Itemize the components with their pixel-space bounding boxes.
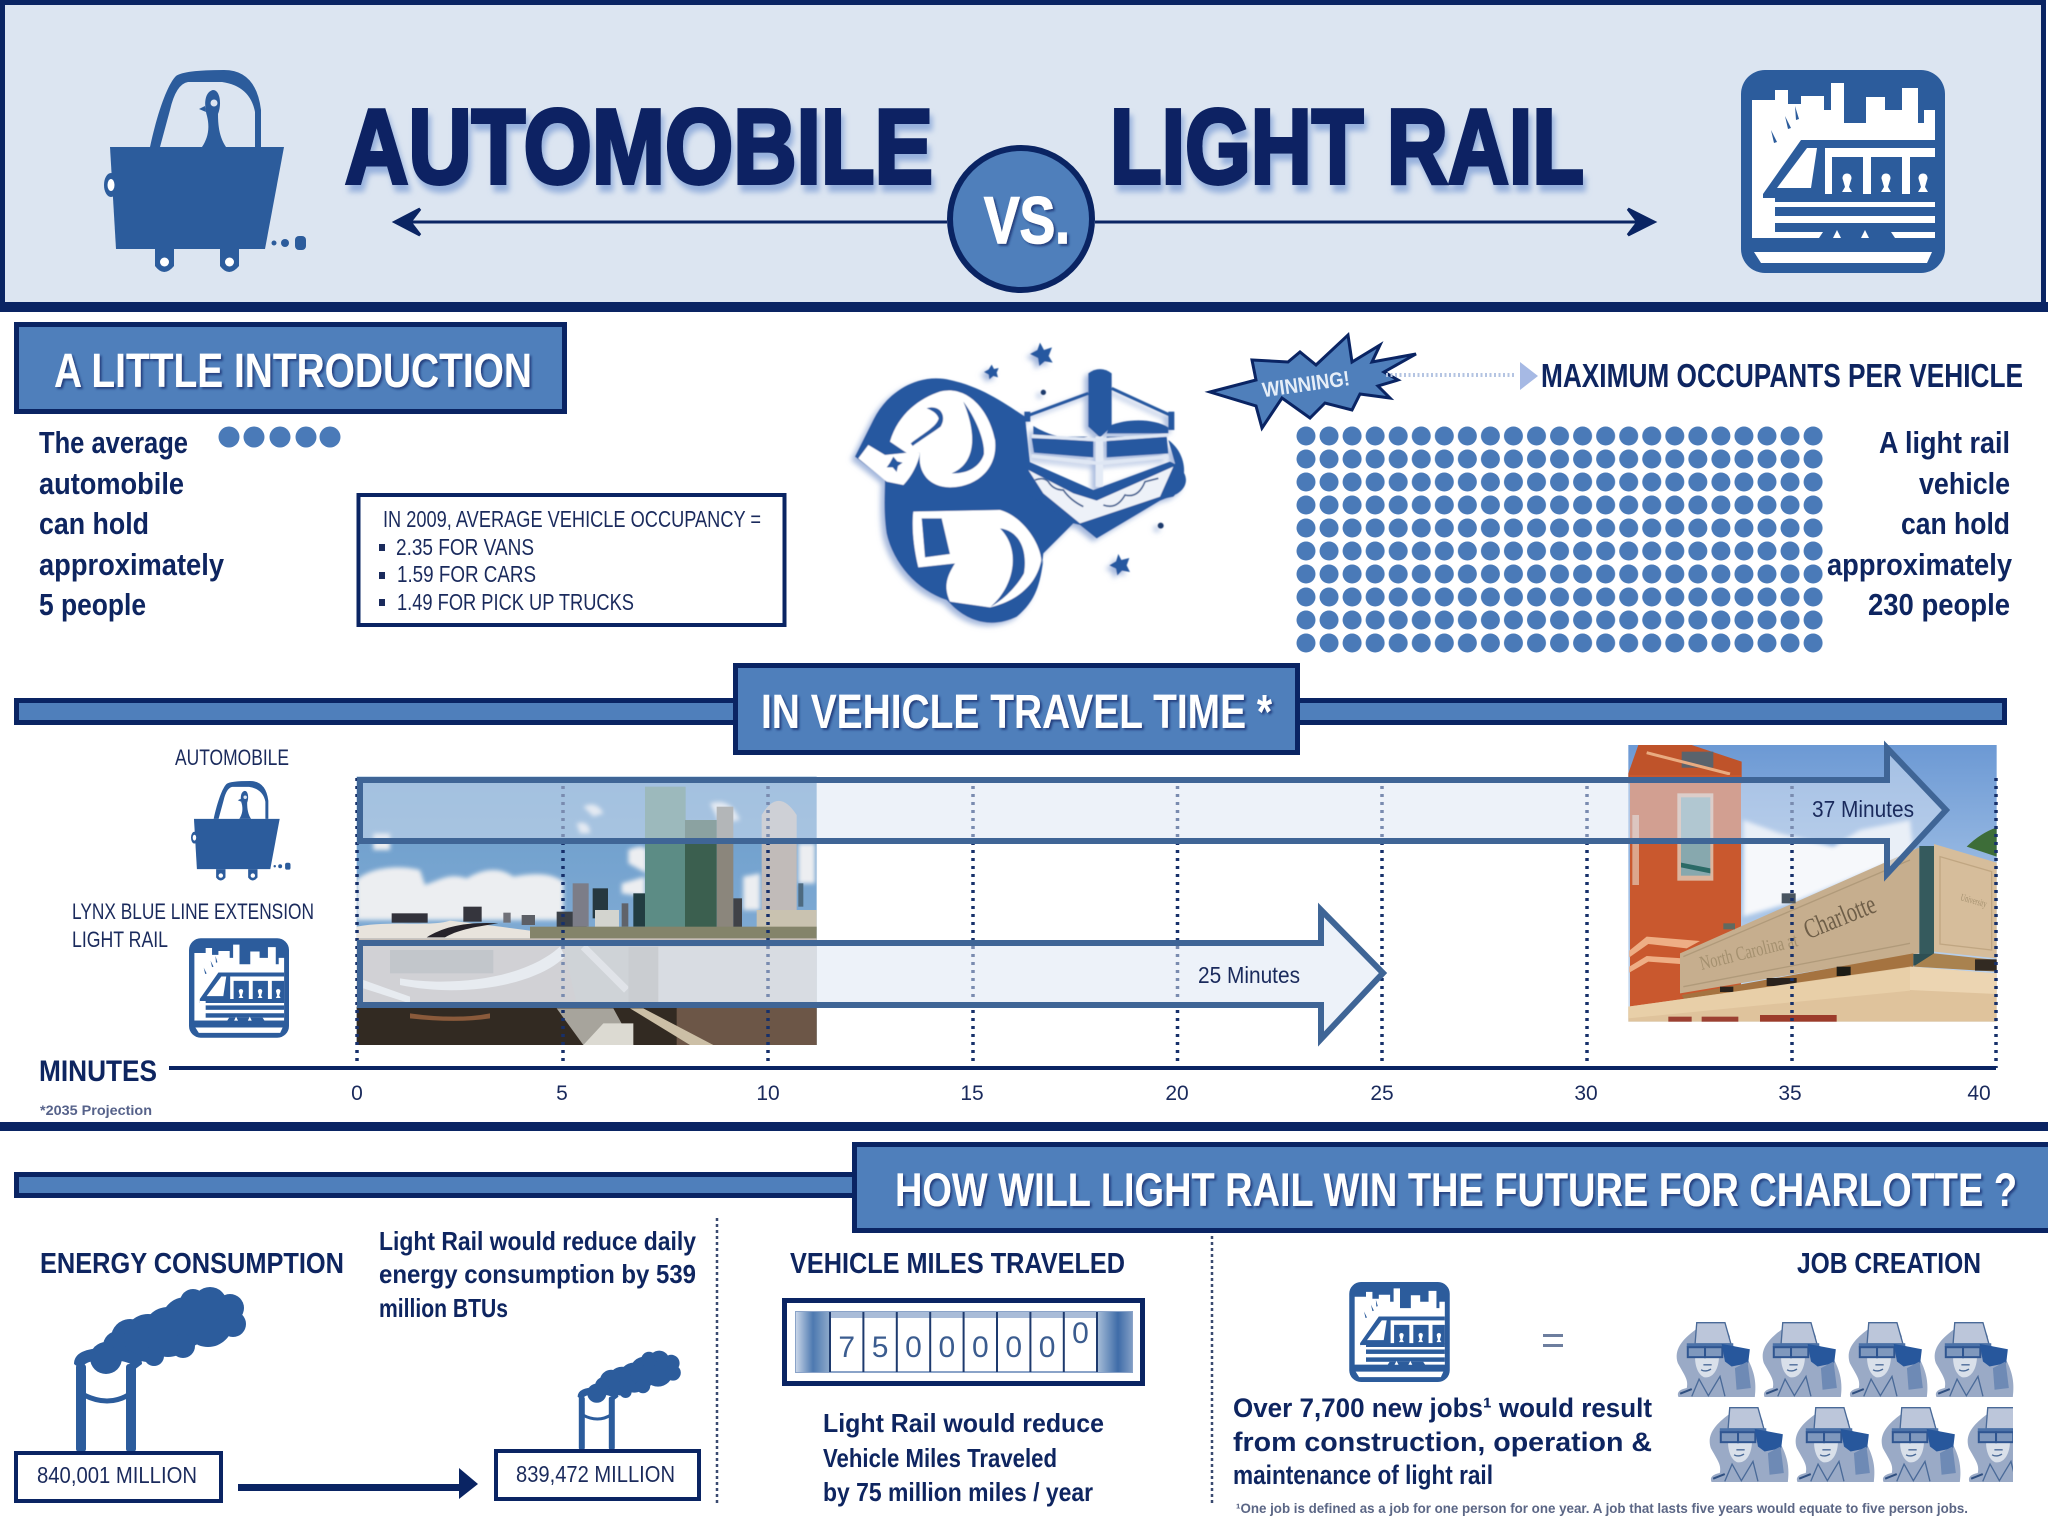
odometer: 75,000,000: 0: [905, 1331, 922, 1364]
section: vehicle miles traveled: [784, 1248, 1142, 1507]
text: automobile capacity: The average: [39, 425, 188, 460]
text: energy reduction: million BTUs: [379, 1293, 508, 1323]
chart: minutes axis: 35: [1778, 1082, 1802, 1105]
icon: light rail train: [1741, 70, 1945, 273]
chart: minutes axis: 40: [1967, 1082, 1991, 1105]
text: jobs: Over 7,700 new jobs¹ would result: [1233, 1393, 1652, 1423]
text: light rail capacity: A light rail: [1879, 425, 2010, 460]
chart: minutes axis: MINUTES: [39, 1055, 157, 1088]
icon: boxing elephant and ring: [855, 343, 1186, 623]
icon: automobile small: [191, 781, 291, 881]
heading: energy consumption: ENERGY CONSUMPTION: [40, 1248, 344, 1280]
chart: minutes axis: 5: [556, 1082, 568, 1105]
title: light rail: LIGHT RAIL: [1110, 88, 1584, 206]
odometer: 75,000,000: 0: [1005, 1331, 1022, 1364]
value box: 839,472 million: 839,472 MILLION: [516, 1461, 675, 1487]
text: jobs: [1233, 1393, 1652, 1490]
pictogram: five occupants: [218, 426, 340, 448]
text: miles reduction: Vehicle Miles Traveled: [823, 1443, 1057, 1473]
footnote: job definition: ¹One job is defined as a job for one person for one year. A job that lasts five years would equate to five person jobs.: [1236, 1500, 1968, 1516]
label: lynx blue line extension light rail: [72, 899, 314, 952]
text: automobile capacity: automobile: [39, 466, 184, 501]
heading: job creation: JOB CREATION: [1797, 1248, 1981, 1280]
value box: 839,472 million: [496, 1451, 699, 1499]
arrow: right toward light rail: [1095, 209, 1654, 235]
callout: average vehicle occupancy: IN 2009, AVERAGE VEHICLE OCCUPANCY =: [383, 506, 761, 532]
text: energy reduction: energy consumption by 539: [379, 1259, 696, 1289]
divider band: [0, 1122, 2048, 1131]
icon: light rail small: [189, 938, 289, 1038]
arrow: light rail 25 minutes: [360, 910, 1383, 1039]
section: energy consumption: [16, 1226, 699, 1501]
heading: a little introduction: [16, 324, 564, 412]
panel: header: [0, 2, 2048, 312]
odometer: 75,000,000: 7: [838, 1331, 855, 1364]
photo: UNC Charlotte building: [1628, 745, 1997, 1022]
odometer: 75,000,000: [784, 1300, 1142, 1384]
icon: automobile: [104, 70, 306, 272]
badge: vs: [950, 148, 1092, 290]
heading: in vehicle travel time: IN VEHICLE TRAVEL TIME *: [761, 686, 1272, 739]
icon: small smokestack: [578, 1351, 681, 1450]
text: automobile capacity: approximately: [39, 547, 225, 582]
arrow: reduction: [238, 1468, 478, 1499]
value box: 840,001 million: 840,001 MILLION: [37, 1462, 197, 1488]
panel: in vehicle travel time: [16, 666, 2004, 1118]
odometer: 75,000,000: 0: [1072, 1317, 1089, 1350]
icon: winning burst: WINNING!: [1261, 367, 1351, 402]
label: automobile: AUTOMOBILE: [175, 745, 289, 770]
icon: winning burst: [1210, 335, 1416, 428]
arrow: dotted pointer to maximum occupants: [1386, 362, 1538, 390]
odometer: 75,000,000: 0: [939, 1331, 955, 1364]
text: energy reduction: Light Rail would reduce daily: [379, 1226, 696, 1256]
title: automobile: AUTOMOBILE: [345, 88, 933, 206]
callout: average vehicle occupancy: 1.49 FOR PICK UP TRUCKS: [397, 589, 634, 615]
panel: introduction: [16, 324, 2023, 654]
odometer: 75,000,000: 0: [972, 1331, 989, 1364]
text: miles reduction: Light Rail would reduce: [823, 1408, 1104, 1438]
section: job creation: [1233, 1248, 2046, 1516]
text: miles reduction: by 75 million miles / year: [823, 1477, 1093, 1507]
arrow: automobile 37 minutes: [360, 748, 1946, 874]
label: lynx blue line extension light rail: LYNX BLUE LINE EXTENSION: [72, 899, 314, 924]
chart: minutes axis: 30: [1574, 1082, 1598, 1105]
text: automobile capacity: [39, 425, 225, 622]
photo: UNC Charlotte building: University: [1959, 892, 1988, 910]
heading: a little introduction: A LITTLE INTRODUCTION: [54, 345, 532, 398]
heading: how will light rail win the future for charlotte: [16, 1144, 2048, 1230]
label: lynx blue line extension light rail: LIGHT RAIL: [72, 927, 168, 952]
photo: UNC Charlotte building: North Carolina at: [1698, 929, 1800, 975]
heading: in vehicle travel time: [16, 666, 2004, 752]
text: light rail capacity: approximately: [1827, 547, 2013, 582]
footnote: 2035 projection: *2035 Projection: [40, 1102, 152, 1118]
text: light rail capacity: vehicle: [1919, 466, 2010, 501]
photo: UNC Charlotte building: Charlotte: [1799, 889, 1880, 946]
text: jobs: from construction, operation &: [1233, 1427, 1652, 1457]
pictogram: 230 occupants: [1294, 424, 1825, 654]
text: light rail capacity: [1827, 425, 2013, 622]
text: energy reduction: [379, 1226, 696, 1323]
text: light rail capacity: can hold: [1901, 506, 2010, 541]
arrow: light rail 25 minutes: 25 Minutes: [1198, 962, 1300, 988]
text: miles reduction: [823, 1408, 1104, 1507]
chart: minutes axis: 15: [960, 1082, 984, 1105]
chart: minutes axis: 0: [351, 1082, 363, 1105]
callout: average vehicle occupancy: [358, 495, 784, 625]
text: jobs: maintenance of light rail: [1233, 1460, 1493, 1490]
callout: average vehicle occupancy: 1.59 FOR CARS: [397, 561, 536, 587]
callout: average vehicle occupancy: 2.35 FOR VANS: [396, 534, 534, 560]
chart: minutes axis: 10: [756, 1082, 780, 1105]
equals sign: [1543, 1334, 1563, 1347]
icon: light rail: [1349, 1282, 1450, 1382]
text: light rail capacity: 230 people: [1868, 587, 2010, 622]
odometer: 75,000,000: 0: [1039, 1331, 1055, 1364]
heading: vehicle miles traveled: VEHICLE MILES TRAVELED: [790, 1248, 1125, 1280]
text: automobile capacity: 5 people: [39, 587, 146, 622]
odometer: 75,000,000: 5: [872, 1331, 888, 1364]
icon: large smokestack: [74, 1287, 246, 1452]
panel: how will light rail win the future: [16, 1144, 2048, 1516]
chart: minutes axis: 25: [1370, 1082, 1394, 1105]
photo: charlotte skyline: [357, 777, 817, 1045]
text: automobile capacity: can hold: [39, 506, 149, 541]
arrow: automobile 37 minutes: 37 Minutes: [1812, 796, 1914, 822]
value box: 840,001 million: [16, 1453, 221, 1501]
arrow: left toward automobile: [395, 209, 947, 235]
chart: time axis gridlines: [357, 778, 1996, 1068]
chart: minutes axis: [39, 1055, 1996, 1105]
pictogram: construction workers: [1677, 1323, 2046, 1482]
badge: vs: VS.: [984, 183, 1070, 257]
chart: minutes axis: 20: [1165, 1082, 1189, 1105]
